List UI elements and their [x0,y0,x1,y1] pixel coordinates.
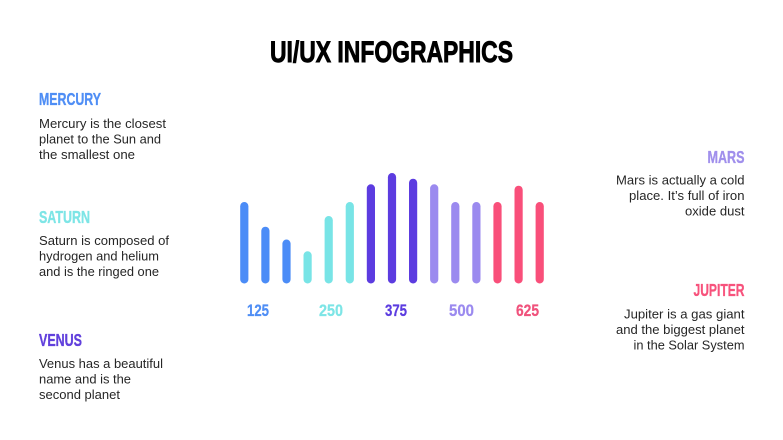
text: Saturn description [39,233,169,279]
panel: Mars [616,147,745,218]
text: Jupiter description: Jupiter is a gas giant [624,306,745,322]
bars: pink [493,186,544,284]
text: Mercury description: Mercury is the closest [39,116,166,131]
axis labels [247,301,539,320]
text: Saturn description: hydrogen and helium [39,248,159,264]
title: UI/UX INFOGRAPHICS [270,36,513,69]
heading: Jupiter: JUPITER [694,280,745,300]
text: Mars description: oxide dust [685,204,745,218]
text: Jupiter description: in the Solar System [634,338,744,352]
bars: lavender [430,184,480,284]
text: Venus description: Venus has a beautiful [39,356,163,371]
panel: Jupiter [616,280,745,352]
label: 125: 125 [247,301,269,320]
heading: Mars: MARS [708,147,744,167]
text: Venus description: second planet [39,387,120,402]
panel: Venus [39,330,163,402]
text: Mars description: Mars is actually a cold [616,172,744,188]
text: Mercury description: the smallest one [39,147,135,162]
text: Saturn description: Saturn is composed of [39,233,169,248]
text: Mars description [616,172,745,218]
text: Venus description: name and is the [39,372,131,386]
bars: blue [240,202,291,284]
text: Saturn description: and is the ringed one [39,264,159,279]
text: Mercury description [39,116,166,162]
text: Jupiter description: and the biggest planet [616,322,745,337]
panel: Saturn [39,207,169,279]
heading: Venus: VENUS [39,330,82,350]
text: Jupiter description [616,306,745,352]
heading: Saturn: SATURN [39,207,90,227]
label: 625: 625 [516,301,539,320]
text: Venus description [39,356,163,402]
text: Mars description: place. It’s full of iron [629,188,744,203]
bars: indigo [367,173,417,284]
label: 500: 500 [449,301,474,320]
label: 375: 375 [385,301,407,320]
bar chart [240,173,544,284]
bars: turquoise [304,202,354,284]
label: 250: 250 [319,301,343,320]
heading: Mercury: MERCURY [39,89,101,109]
panel: Mercury [39,89,166,162]
text: Mercury description: planet to the Sun and [39,132,161,146]
